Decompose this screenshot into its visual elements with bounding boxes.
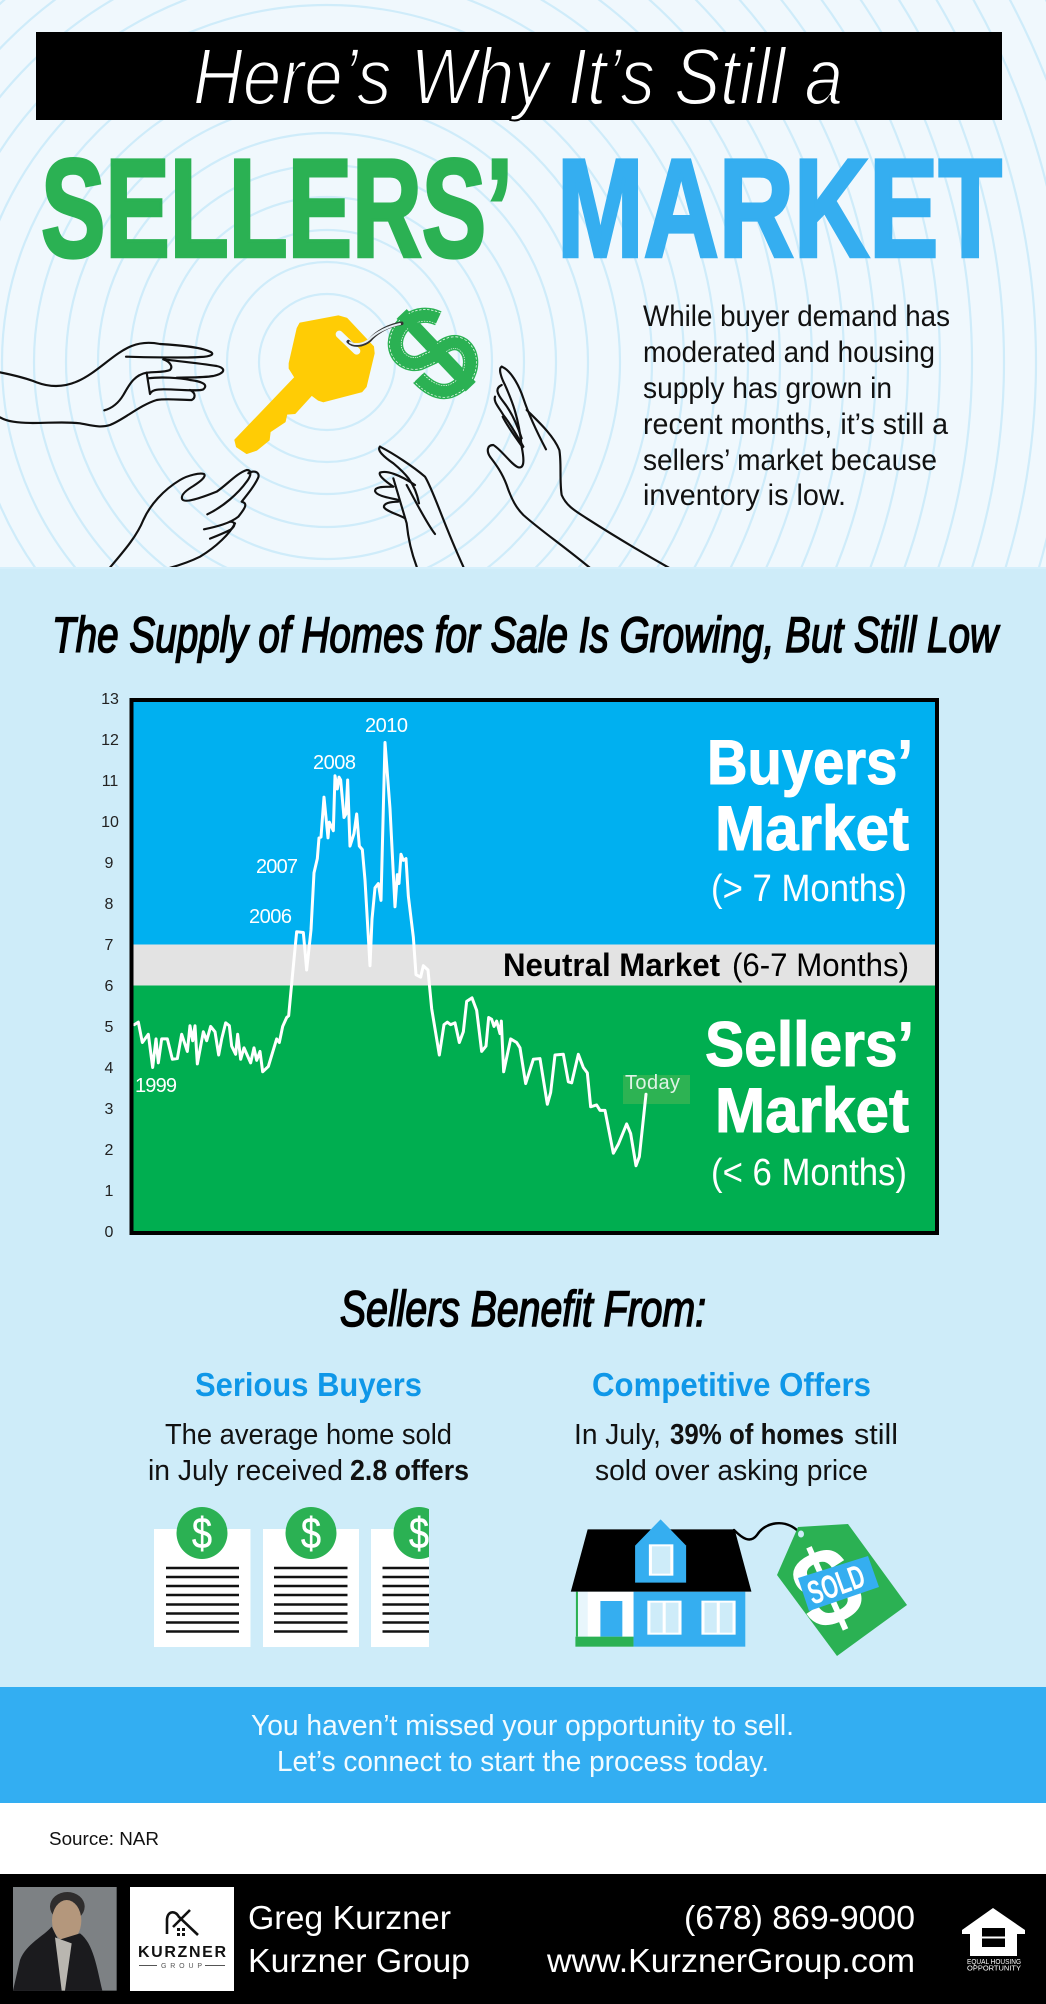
icon: equal housing opportunity: OPPORTUNITY bbox=[967, 1964, 1021, 1972]
chart axis labels: 10 bbox=[101, 814, 119, 831]
icon: offer documents bbox=[154, 1507, 429, 1647]
title: Sellers': SELLERS’ bbox=[41, 130, 513, 286]
icon: offer documents: $ bbox=[192, 1509, 212, 1558]
icon: house bbox=[571, 1519, 751, 1647]
chart axis labels: 7 bbox=[105, 937, 114, 954]
chart axis labels: 2 bbox=[105, 1142, 114, 1159]
chart year labels: 1999 bbox=[135, 1075, 177, 1097]
chart year labels: 2010 bbox=[365, 715, 408, 737]
label: neutral market: Neutral Market bbox=[503, 947, 720, 983]
panel: competitive offers bbox=[571, 1366, 907, 1656]
contact details bbox=[546, 1899, 915, 1979]
chart axis labels: 3 bbox=[105, 1101, 114, 1118]
chart: months of inventory bbox=[101, 691, 937, 1241]
icon: left lower hand bbox=[109, 470, 259, 569]
chart axis labels: 4 bbox=[105, 1060, 114, 1077]
panel: call to action: You haven’t missed your opportunity to sell. bbox=[251, 1710, 794, 1742]
panel: serious buyers bbox=[148, 1366, 469, 1647]
contact details: www.KurznerGroup.com bbox=[546, 1942, 915, 1979]
agent name: Greg Kurzner bbox=[248, 1899, 451, 1936]
text: homes over asking: still bbox=[854, 1419, 898, 1451]
chart zone: sellers' market bbox=[133, 986, 936, 1232]
icon: right hand bbox=[488, 367, 672, 569]
chart zone: neutral market bbox=[133, 944, 936, 986]
panel: call to action bbox=[0, 1687, 1046, 1803]
chart zone: buyers' market bbox=[133, 701, 936, 944]
chart year labels: 2006 bbox=[249, 906, 292, 928]
label: buyers' market: Market bbox=[715, 794, 909, 864]
intro paragraph: inventory is low. bbox=[643, 479, 846, 512]
source note: Source: NAR bbox=[49, 1829, 159, 1849]
chart year labels: Today bbox=[625, 1072, 680, 1094]
label: neutral market bbox=[503, 947, 909, 983]
contact details: (678) 869-9000 bbox=[684, 1899, 915, 1936]
subheading: serious buyers: Serious Buyers bbox=[195, 1366, 422, 1403]
icon: offer documents: $ bbox=[301, 1509, 321, 1558]
label: buyers' market: (> 7 Months) bbox=[711, 868, 907, 910]
text: offers received bbox=[148, 1419, 469, 1487]
chart axis labels: 13 bbox=[101, 691, 119, 708]
label: buyers' market: Buyers’ bbox=[707, 728, 913, 798]
icon: green dollar sign tag bbox=[395, 314, 471, 391]
chart axis labels: 5 bbox=[105, 1019, 114, 1036]
text: offers received: in July received bbox=[148, 1455, 343, 1487]
chart axis labels: 1 bbox=[105, 1183, 114, 1200]
intro paragraph: supply has grown in bbox=[643, 372, 892, 405]
chart axis labels: 12 bbox=[101, 732, 119, 749]
label: sellers' market: Sellers’ bbox=[705, 1010, 914, 1080]
text: homes over asking: sold over asking price bbox=[595, 1455, 868, 1487]
icon: sold price tag: SOLD bbox=[802, 1557, 870, 1611]
icon: key string bbox=[348, 323, 402, 345]
label: buyers' market bbox=[707, 728, 913, 910]
today highlight bbox=[623, 1075, 690, 1104]
hero bottom edge bbox=[0, 567, 1046, 569]
label: sellers' market bbox=[705, 1010, 914, 1194]
agent photo bbox=[13, 1887, 117, 1991]
text: homes over asking: In July, bbox=[574, 1419, 661, 1451]
text: offers received: The average home sold bbox=[165, 1419, 452, 1451]
chart line bbox=[134, 742, 646, 1166]
text: offers received: 2.8 offers bbox=[350, 1455, 469, 1487]
icon: sold price tag: $ bbox=[774, 1519, 880, 1656]
company logo: KURZNER bbox=[138, 1944, 226, 1961]
chart axis labels: 8 bbox=[105, 896, 114, 913]
chart axis labels: 9 bbox=[105, 855, 114, 872]
label: sellers' market: Market bbox=[715, 1076, 909, 1146]
icon: yellow key bbox=[235, 316, 374, 453]
label: neutral market: (6-7 Months) bbox=[732, 947, 909, 983]
intro paragraph: While buyer demand has bbox=[643, 300, 950, 333]
icon: sold price tag bbox=[734, 1519, 907, 1656]
panel: supply section background bbox=[0, 569, 1046, 1687]
icon: equal housing opportunity: EQUAL HOUSING bbox=[967, 1957, 1021, 1966]
intro paragraph bbox=[643, 300, 950, 512]
chart axis labels bbox=[101, 691, 119, 1241]
chart frame bbox=[132, 700, 937, 1233]
chart axis labels: 11 bbox=[102, 773, 118, 790]
intro paragraph: recent months, it’s still a bbox=[643, 408, 948, 441]
icon: middle hand bbox=[375, 447, 463, 567]
subheading: competitive offers: Competitive Offers bbox=[592, 1366, 871, 1403]
text: homes over asking bbox=[574, 1419, 898, 1487]
company logo: GROUP bbox=[161, 1963, 202, 1970]
icon: offer documents: $ bbox=[409, 1509, 429, 1558]
intro paragraph: moderated and housing bbox=[643, 336, 935, 369]
agent name: Kurzner Group bbox=[248, 1942, 470, 1979]
panel: footer bbox=[0, 1874, 1046, 2004]
chart year labels bbox=[135, 715, 680, 1097]
chart axis labels: 6 bbox=[105, 978, 114, 995]
title banner: Here’s Why It’s Still a bbox=[193, 32, 843, 121]
chart year labels: 2008 bbox=[313, 752, 356, 774]
panel: call to action: Let’s connect to start the process today. bbox=[277, 1746, 769, 1778]
icon: left upper hand bbox=[0, 343, 223, 426]
agent name bbox=[248, 1899, 470, 1979]
icon: equal housing opportunity bbox=[962, 1908, 1025, 1972]
text: homes over asking: 39% of homes bbox=[670, 1419, 844, 1451]
chart axis labels: 0 bbox=[105, 1224, 114, 1241]
heading: sellers benefit from: Sellers Benefit From: bbox=[340, 1281, 706, 1337]
panel: hero header bbox=[0, 0, 1046, 569]
company logo bbox=[130, 1887, 234, 1991]
chart year labels: 2007 bbox=[256, 856, 298, 878]
intro paragraph: sellers’ market because bbox=[643, 444, 937, 477]
label: sellers' market: (< 6 Months) bbox=[711, 1152, 907, 1194]
